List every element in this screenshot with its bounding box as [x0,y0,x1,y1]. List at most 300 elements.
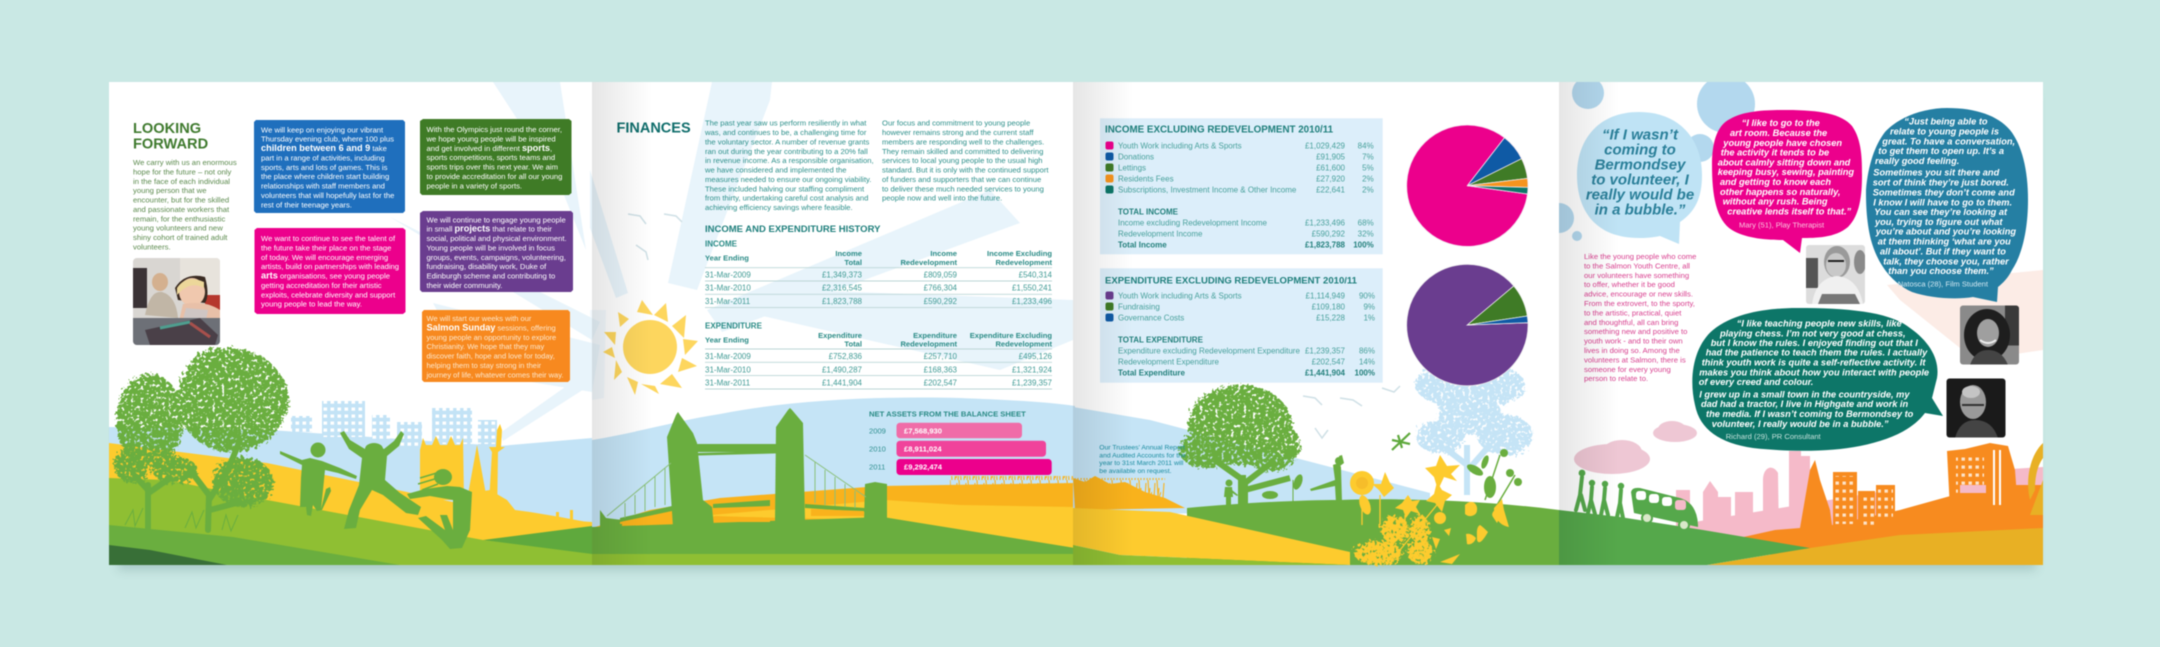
net assets bar chart [869,410,1052,475]
panel: expenditure legend table: 9% [1363,303,1375,312]
panel: income legend table: 32% [1358,229,1374,238]
sky wave panel 2 [592,398,1075,530]
callout: sports (green): sports competitions, sports teams and [426,153,555,162]
callout: children club (blue): rest of their teenage years. [261,200,352,209]
panel: income legend table: £590,292 [1312,229,1346,238]
callout: sports (green) [420,119,572,195]
birds [628,214,1400,438]
yellow field panel 3 [1073,508,1350,565]
mid green hills [109,525,400,565]
speech bubble: Richard: “I like teaching people new skills, like [1737,318,1902,328]
callout: sports (green): we hope young people will be inspired [426,134,556,143]
net assets bar chart: £7,568,930 [904,426,942,435]
speech bubble: Natosca: Sometimes you sit there and [1873,168,2000,178]
speech bubble: Natosca: I know I will have to go to them. [1873,197,2012,207]
expenditure history table: 31-Mar-2010 [705,365,751,374]
speech bubble: headline quote: in a bubble.” [1595,202,1686,219]
blue tree [1415,361,1533,495]
volunteers paragraph: to the artistic, practical, quiet [1584,308,1682,317]
sky wedge panel 3 [1073,407,1430,515]
net assets bar chart: £8,911,024 [904,444,942,453]
speech bubble: Natosca: You can see they’re looking at [1874,207,2008,217]
expenditure history table: Redevelopment [995,340,1052,349]
landscape: panel 2 [592,300,1075,565]
speech bubble: Richard: the media. If I wasn’t coming to Bermondsey to [1706,409,1914,419]
panel 1 intro text: volunteers. [133,242,171,251]
panel: expenditure legend table: Youth Work including Arts & Sports [1118,292,1242,301]
callout: children club (blue): We will keep on enjoying our vibrant [261,125,384,134]
volunteers paragraph: lives in doing so. Among the [1584,346,1680,355]
finances text column 1: These included halving our staffing compliment [705,184,865,193]
panel 1 intro text: shiny cohort of trained adult [133,233,228,242]
income history table: £809,059 [924,270,958,279]
income pie chart [1407,125,1528,246]
speech bubble: Natosca: you, trying to figure out what [1874,217,2003,227]
green tree [1179,385,1300,505]
callout: sports (green): sports, [522,143,552,153]
dark green corner hill [109,545,227,565]
income history table: Income [930,249,957,258]
speech bubble: Richard: Richard (29), PR Consultant [1726,432,1822,441]
callout: sports (green): to provide accreditation for all our young [426,172,562,181]
callout: children club (blue): sports, arts and lots of games. This is [261,163,388,172]
building windows [1835,450,2001,526]
callout: Salmon Sunday (orange) [422,310,570,382]
callout: projects (purple): their wider community. [426,281,502,290]
speech bubble: Richard: volunteer, I really would be in a bubble.” [1712,419,1889,429]
trees panel 1 [114,348,289,531]
income history table [705,240,1053,308]
panel: expenditure legend table: TOTAL EXPENDITURE [1118,336,1204,345]
speech bubble: Mary: keeping busy, sewing, painting [1718,167,1854,177]
speech bubble: Natosca: “Just being able to [1904,116,1988,126]
speech bubble: Mary: “I like to go to the [1742,118,1820,128]
callout: arts (pink): getting accreditation for their artistic [261,281,382,290]
speech bubble: Mary: young people have chosen [1722,138,1842,148]
callout: projects (purple): Edinburgh scheme and contributing to [426,272,555,281]
photo: Richard [1946,378,2006,438]
volunteers paragraph: person to relate to. [1584,374,1648,383]
expenditure history table: Expenditure [913,331,957,340]
income history table: Income Excluding [987,249,1052,258]
income history table: £1,550,241 [1012,284,1053,293]
dragonfly [1392,433,1410,450]
panel 2 heading: FINANCES [616,121,691,137]
photo: Mary [1806,245,1866,304]
callout: projects (purple): in small [426,225,455,234]
yellow hillside [109,443,592,545]
panel: income legend table [1100,118,1383,254]
callout: arts (pink): the future take their place on the stage [261,243,391,252]
speech bubble: headline quote: coming to [1604,141,1676,158]
panel: expenditure legend table: 86% [1359,347,1375,356]
panel: income legend table: £27,920 [1316,174,1346,183]
child and dancer silhouettes [1224,455,1344,505]
finances text column 2: of funders and supporters that we can continue [882,175,1041,184]
income history table: £766,304 [924,284,958,293]
callout: Salmon Sunday (orange): discover faith, hope and love for today, [426,352,555,361]
callout: sports (green): people in a variety of sports. [426,181,522,190]
panel: income legend table: £91,905 [1316,152,1346,161]
income history table: £590,292 [924,297,958,306]
speech bubble: headline quote: to volunteer, I [1591,171,1690,188]
green minibus [1631,488,1698,530]
speech bubble: Mary: creative lends itself to that.” [1727,206,1852,216]
pale pink rays [1887,270,2043,360]
panel: income legend table: Subscriptions, Investment Income & Other Income [1118,185,1297,194]
speech bubble: Mary: the activity it tends to be [1721,147,1829,157]
income history table: Total [844,258,862,267]
net assets bar chart: 2009 [869,426,886,435]
panel: income legend table: Lettings [1118,163,1146,172]
sun [603,300,698,395]
finances text column 2: services to local young people to the usual high [882,156,1043,165]
panel: income legend table: £22,641 [1316,185,1346,194]
callout: Salmon Sunday (orange): Salmon Sunday [426,322,496,332]
income history table: Redevelopment [900,258,957,267]
panel: expenditure legend table: EXPENDITURE EXCLUDING REDEVELOPMENT 2010/11 [1105,276,1358,287]
speech bubble: Mary: Mary (51), Play Therapist [1739,220,1825,229]
panel: income legend table: 100% [1353,240,1374,249]
speech bubble: Natosca: Sometimes they don’t come and [1873,187,2015,197]
finances text column 1: measures needed to ensure our ongoing viability. [705,175,871,184]
panel: expenditure legend table: Total Expenditure [1118,369,1186,378]
expenditure history table: £168,363 [924,365,958,374]
expenditure history table: £1,321,924 [1012,365,1053,374]
callout: arts (pink): of today. We will encourage emerging [261,253,388,262]
finances text column 1: ran out during the year contributing to a 20% fall [705,147,868,156]
net assets bar chart: £9,292,474 [904,462,943,471]
photo: girl doing crafts [133,258,220,345]
annual report note: year to 31st March 2011 will [1099,460,1184,467]
panel: income legend table: Total Income [1118,240,1167,249]
speech bubble: Natosca: relate to young people is [1890,126,1999,136]
income history table: 31-Mar-2011 [705,297,751,306]
fold shading between panels [592,82,1619,565]
callout: arts (pink): organisations, see young people [278,272,390,281]
volunteers paragraph: youth work - and to their own [1584,337,1683,346]
finances text column 2: standard. But it is only with the continued support [882,166,1049,175]
panel: income legend table: £1,823,788 [1305,240,1346,249]
speech bubble: Mary: other happens so naturally, [1720,187,1840,197]
speech bubble: headline quote: “If I wasn’t [1602,126,1679,143]
expenditure history table: 31-Mar-2011 [705,379,751,388]
expenditure history table: £257,710 [924,352,958,361]
speech bubble: Natosca: Natosca (28), Film Student [1898,280,1989,289]
panel: income legend table: Redevelopment Income [1118,229,1203,238]
yellow flowers and butterflies [1350,455,1509,565]
income history table: £1,349,373 [822,270,863,279]
income history table: £1,233,496 [1012,297,1053,306]
history heading: INCOME AND EXPENDITURE HISTORY [705,224,881,235]
expenditure history table: Redevelopment [900,340,957,349]
sky band panel 1 [109,427,592,530]
income history table: 31-Mar-2010 [705,284,751,293]
panel: expenditure legend table: Expenditure excluding Redevelopment Expenditure [1118,347,1300,356]
income history table: 31-Mar-2009 [705,270,751,279]
income history table: £2,316,545 [822,284,863,293]
callout: arts (pink): young people to lead the way. [261,300,362,309]
brochure page background [109,82,2043,565]
speech bubble: Natosca: great. To have a conversation, [1881,136,2015,146]
blue skyline panel 1 [291,401,497,450]
wheat panel 3 [1073,476,1185,510]
green hill panel 3 [1187,499,1559,565]
speech bubble: Richard: think youth work is quite a self-reflective activity. It [1702,358,1926,368]
green hill panel 4 [1559,510,1810,565]
callout: arts (pink): artists, build on partnerships with leading [261,262,399,271]
callout: sports (green): With the Olympics just round the corner, [426,125,562,134]
finances text column 2: They remain skilled and committed to delivering [882,147,1043,156]
panel: expenditure legend table [1100,268,1383,383]
finances text column 1: the voluntary sector. A number of revenue grants [705,137,870,146]
callout: projects (purple): projects that relate to their [455,224,552,234]
callout: sports (green): sports trips over this next year. We aim [426,163,558,172]
panel: income legend table: 2% [1362,185,1374,194]
panel: expenditure legend table: £202,547 [1312,358,1346,367]
finances text column 2: members are responding well to the challenges. [882,137,1044,146]
callout: arts (pink): We want to continue to see the talent of [261,234,396,243]
speech bubble: Mary: and getting to know each [1720,177,1831,187]
finances text column 2: Our focus and commitment to young people [882,119,1030,128]
expenditure history table: Total [844,340,862,349]
panel: expenditure legend table: 90% [1359,292,1375,301]
callout: projects (purple): fundraising, disability work, Duke of [426,262,547,271]
speech bubble: headline quote [1577,112,1702,244]
people walking silhouettes [1576,470,1624,518]
volunteers paragraph: to the Salmon Youth Centre, all [1584,261,1690,270]
orange hill [592,483,1075,540]
expenditure history table: 31-Mar-2009 [705,352,751,361]
yellow ground [1707,528,2043,565]
panel: income legend table: £1,233,496 [1305,218,1346,227]
volunteers paragraph: something new and positive to [1584,327,1687,336]
landscape: panel 1 [109,348,592,565]
income history table: Year Ending [705,254,749,263]
panel: income legend table: 5% [1362,163,1374,172]
sprigs of foliage [1262,449,1522,505]
speech bubble: Richard: had the patience to teach them the rules. I actually [1706,348,1928,358]
speech bubble: Natosca: all about’. But if they want to [1880,246,2006,256]
annual report note: be available on request. [1099,468,1172,475]
speech bubble: headline quote: really would be [1586,187,1694,204]
callout: children club (blue): children between 6 and 9 [261,143,370,153]
Tower Bridge [600,408,887,527]
panel: income legend table: TOTAL INCOME [1118,207,1179,216]
panel: expenditure legend table: 100% [1355,369,1375,378]
finances text column 1: in revenue income. As a responsible organisation, [705,156,874,165]
photo: Natosca [1960,306,2019,365]
panel: income legend table: £1,029,429 [1305,141,1346,150]
panel: expenditure legend table: 14% [1359,358,1375,367]
panel 1 intro text: encounter, but for the skilled [133,196,229,205]
jumping children silhouettes [280,431,472,549]
speech bubble: Mary: about calmly sitting down and [1718,157,1851,167]
speech bubble: Natosca: to get them to open up. It’s a [1878,146,2004,156]
landscape: panel 3 [628,214,1559,565]
callout: children club (blue): relationships with staff members and [261,182,385,191]
callout: Salmon Sunday (orange): journey of life, whatever comes their way. [426,370,564,379]
speech bubble: Richard: I grew up in a small town in the countryside, my [1699,389,1910,399]
speech bubble: Natosca: you’re about and you’re looking [1875,227,2016,237]
income history table: £540,314 [1019,270,1053,279]
golden sculpture [2028,443,2043,515]
speech bubble: Mary [1712,110,1862,253]
light green hill [109,478,592,565]
speech bubble: Richard: but I know the rules. I enjoyed finding out that I [1711,338,1918,348]
callout: Salmon Sunday (orange): sessions, offering [495,323,556,332]
callout: children club (blue): take [370,144,387,153]
net assets bar chart: 2011 [869,462,885,471]
speech bubble: Richard: playing chess. I’m not very good at chess, [1719,328,1906,338]
panel: expenditure legend table: £1,239,357 [1305,347,1346,356]
speech bubble: Richard: makes you think about how you interact with people [1699,367,1929,377]
expenditure history table: EXPENDITURE [705,322,763,331]
yellow castle and monuments [420,424,592,540]
expenditure history table: Expenditure [818,331,862,340]
panel: expenditure legend table: £1,114,949 [1306,292,1346,301]
volunteers paragraph: Like the young people who come [1584,252,1696,261]
speech bubble: Mary: art room. Because the [1730,128,1827,138]
speech bubble: Natosca: at them thinking ‘what are you [1878,237,2011,247]
net assets bar chart: NET ASSETS FROM THE BALANCE SHEET [869,410,1026,419]
panel: income legend table: £61,600 [1316,163,1346,172]
page drop shadow [118,92,2036,570]
panel 1 intro text: in the face of each individual [133,177,230,186]
income history table: Income [835,249,862,258]
income history table: Redevelopment [995,258,1052,267]
speech bubble: Natosca: than you choose them.” [1888,266,1994,276]
expenditure history table: £495,126 [1019,352,1053,361]
green hill panel 2 [592,517,1075,556]
expenditure history table: £752,836 [829,352,863,361]
finances text column 2: people now and well into the future. [882,194,1002,203]
callout: arts (pink): exploits, celebrate diversity and support [261,290,396,299]
landscape: panel 4 [1559,75,2043,565]
panel 1 intro text: young person that we [133,186,207,195]
net assets bar chart: 2010 [869,444,886,453]
callout: Salmon Sunday (orange): Christianity. We hope that they may [426,342,544,351]
expenditure pie chart [1407,264,1528,386]
volunteers paragraph: our volunteers have something [1584,271,1689,280]
volunteers paragraph: volunteers at Salmon, there is [1584,355,1686,364]
callout: arts (pink): arts [261,271,278,281]
panel 1 intro text: young volunteers and new [133,224,223,233]
panel: income legend table: 7% [1362,152,1374,161]
decorative bubbles [1559,75,1755,241]
annual report note: Our Trustees' Annual Report [1099,445,1185,452]
callout: children club (blue) [254,120,405,213]
volunteers paragraph: From the extrovert, to the sporty, [1584,299,1695,308]
speech bubble: Natosca: really good feeling. [1875,156,1959,166]
panel: expenditure legend table: Governance Costs [1118,314,1184,323]
wheat panel 2 [950,476,1075,508]
panel: income legend table: 84% [1358,141,1374,150]
panel: expenditure legend table: £1,441,904 [1305,369,1346,378]
panel 1 intro text: We carry with us an enormous [133,158,237,167]
expenditure history table [705,322,1053,389]
panel: income legend table: INCOME EXCLUDING REDEVELOPMENT 2010/11 [1105,125,1334,136]
finances text column 1: achieving efficiency savings where feasible. [705,203,853,212]
expenditure history table: £1,441,904 [822,379,863,388]
yellow field panel 2 [700,500,1075,550]
decorative sun rays [390,82,1073,441]
speech bubble: Richard [1692,308,1943,451]
expenditure history table: £1,490,287 [822,365,863,374]
expenditure history table: £202,547 [924,379,958,388]
speech bubble: Richard: of every creed and colour. [1699,377,1813,387]
annual report note: and Audited Accounts for the [1099,452,1186,459]
expenditure history table: £1,239,357 [1012,379,1053,388]
volunteers paragraph: to offer, whether it be good [1584,280,1675,289]
speech bubble: Natosca [1866,108,2028,302]
callout: children club (blue): volunteers that will hopefully last for the [261,191,394,200]
panel: expenditure legend table: Redevelopment Expenditure [1118,358,1220,367]
finances text column 2: to deliver these much needed services to young [882,184,1044,193]
panel: income legend table: Donations [1118,152,1154,161]
pink clouds [1574,421,1697,474]
expenditure history table: Expenditure Excluding [970,331,1052,340]
callout: projects (purple): social, political and physical environment. [426,234,567,243]
panel: expenditure legend table: £15,228 [1316,314,1346,323]
panel: income legend table: Income excluding Redevelopment Income [1118,218,1268,227]
callout: children club (blue): part in a range of activities, including [261,153,385,162]
speech bubble: Mary: without any rush. Being [1723,197,1828,207]
expenditure history table: Year Ending [705,336,749,345]
panel: expenditure legend table: Fundraising [1118,303,1160,312]
volunteers paragraph: someone for every young [1584,365,1671,374]
callout: projects (purple): groups, events, campaigns, volunteering, [426,253,566,262]
finances text column 1: was, and continues to be, a challenging time for [704,128,867,137]
callout: projects (purple): We will continue to engage young people [426,215,566,224]
speech bubble: Natosca: talk, they choose you, rather [1883,256,2010,266]
panel 1 intro text: and passionate workers that [133,205,230,214]
panel 1 heading: LOOKING [133,121,201,137]
panel: income legend table: Residents Fees [1118,174,1174,183]
callout: children club (blue): the place where children start building [261,172,389,181]
speech bubble: headline quote: Bermondsey [1595,156,1686,173]
callout: arts (pink) [254,228,406,314]
callout: projects (purple): Young people will be involved in focus [426,243,555,252]
finances text column 1: The past year saw us perform resiliently in what [705,119,867,128]
callout: projects (purple) [420,211,573,292]
volunteers paragraph: and thoughtful, all can bring [1584,318,1678,327]
panel: expenditure legend table: 1% [1363,314,1375,323]
callout: children club (blue): Thursday evening club, where 100 plus [261,135,394,144]
panel: expenditure legend table: £109,180 [1312,303,1346,312]
panel 1 heading: FORWARD [133,136,208,152]
panel 1 intro text: hope for the future – not only [133,167,231,176]
orange buildings and ground [1730,443,2043,565]
callout: sports (green): and get involved in different [426,144,522,153]
callout: Salmon Sunday (orange): helping them to stay strong in their [426,361,542,370]
speech bubble: Natosca: sort of think they’re just bored. [1873,177,2009,187]
income history table: £1,823,788 [822,297,863,306]
pink skyline [1676,451,2043,541]
finances text column 1: we have considered and implemented the [704,166,846,175]
panel: income legend table: Youth Work including Arts & Sports [1118,141,1242,150]
volunteers paragraph: advice, encourage or new skills. [1584,290,1693,299]
income history table: INCOME [705,240,738,249]
panel 1 intro text: remain, for the enthusiastic [133,214,225,223]
callout: Salmon Sunday (orange): young people an opportunity to explore [426,333,556,342]
callout: Salmon Sunday (orange): We will start our weeks with our [426,314,532,323]
panel: income legend table: 2% [1362,174,1374,183]
speech bubble: Richard: dad had a tractor, I live in Highgate and work in [1701,399,1908,409]
finances text column 1: from thirty, undertaking careful cost analysis and [705,194,868,203]
finances text column 2: however remains strong and the current staff [882,128,1034,137]
panel: income legend table: 68% [1358,218,1374,227]
